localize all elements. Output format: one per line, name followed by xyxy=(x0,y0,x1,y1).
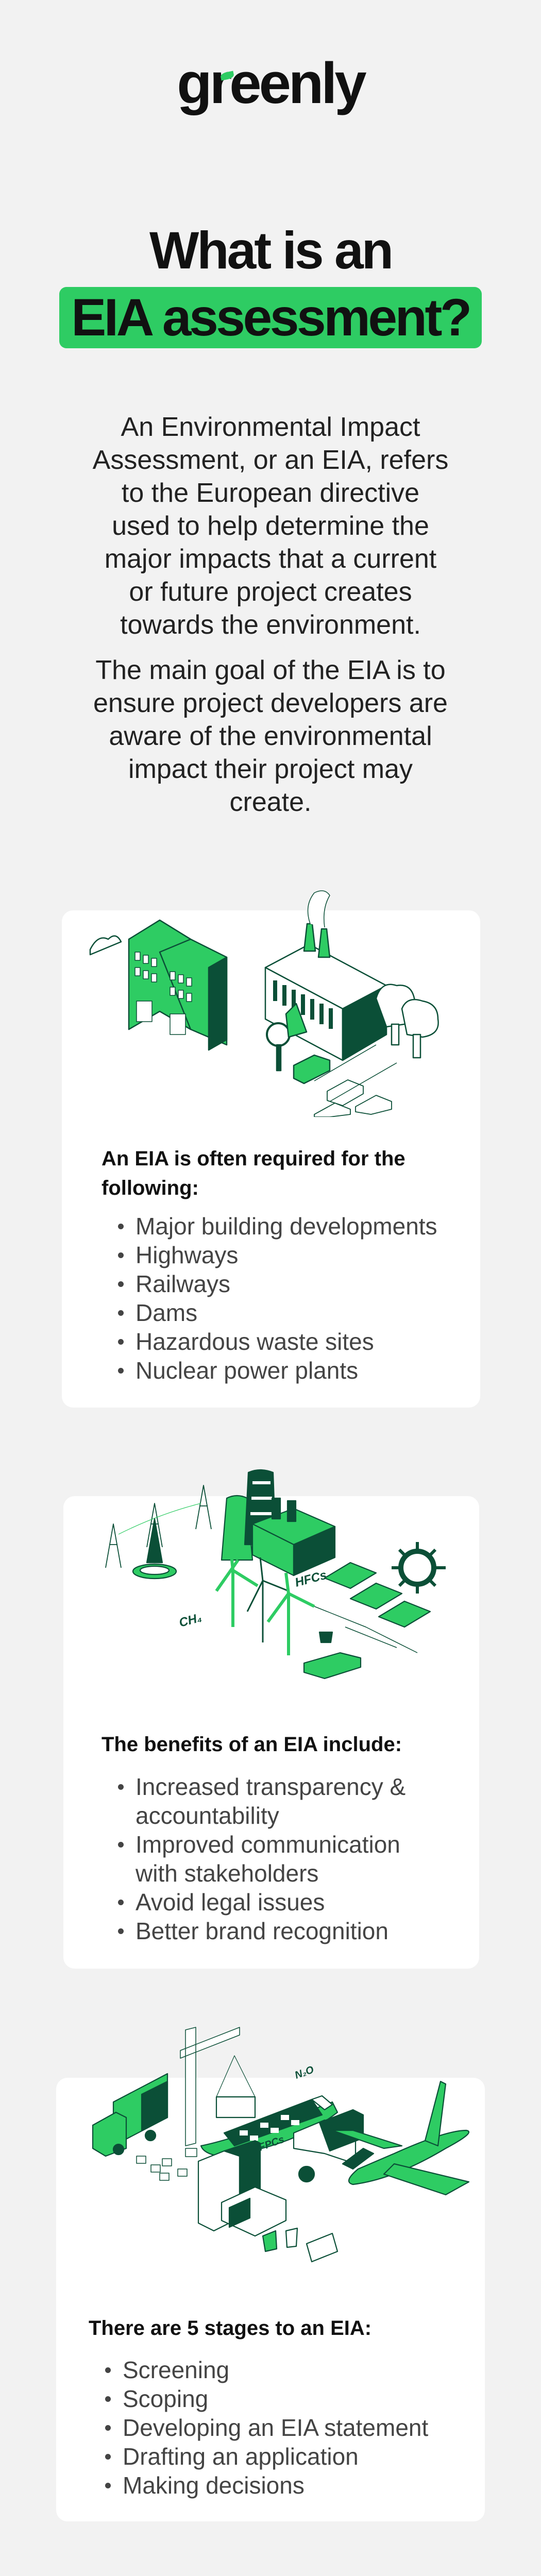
list: required projects: Major building developments xyxy=(136,1213,437,1240)
heading: stages: There are 5 stages to an EIA: xyxy=(89,2317,371,2340)
intro paragraph 1: An Environmental Impact xyxy=(121,412,420,442)
list: benefits: Avoid legal issues xyxy=(136,1889,325,1916)
list: stages: Scoping xyxy=(123,2385,208,2412)
list: required projects: Hazardous waste sites xyxy=(136,1328,374,1355)
illustration: energy, wind turbines, solar panels: HFCs xyxy=(294,1568,328,1590)
list: required projects: Nuclear power plants xyxy=(136,1357,358,1384)
panel: benefits xyxy=(63,1496,479,1969)
illustration: transport, ship, plane, crane: N₂O xyxy=(293,2064,315,2081)
illustration: energy, wind turbines, solar panels xyxy=(105,1469,446,1680)
list: benefits: Improved communication xyxy=(136,1831,400,1858)
list: stages: Screening xyxy=(123,2357,229,2383)
illustration: transport, ship, plane, crane xyxy=(92,2027,470,2263)
list: benefits: Increased transparency & xyxy=(136,1773,405,1800)
logo: top greenly: greenly xyxy=(177,51,364,115)
list: required projects xyxy=(118,1213,437,1384)
intro paragraph 2: impact their project may xyxy=(128,754,413,784)
heading: required for: An EIA is often required for the xyxy=(102,1147,405,1170)
intro paragraph 1: major impacts that a current xyxy=(105,544,436,574)
list: benefits xyxy=(118,1773,405,1944)
heading: required for xyxy=(102,1147,405,1199)
list: benefits: accountability xyxy=(136,1802,279,1829)
intro paragraph 1 xyxy=(93,412,448,640)
intro paragraph 1: to the European directive xyxy=(122,478,419,508)
intro paragraph 1: Assessment, or an EIA, refers xyxy=(93,445,448,475)
panel: required for xyxy=(62,910,480,1408)
list: stages: Making decisions xyxy=(123,2472,305,2499)
list: benefits: with stakeholders xyxy=(136,1860,318,1887)
intro paragraph 2: The main goal of the EIA is to xyxy=(95,655,446,685)
title highlight: EIA assessment?: EIA assessment? xyxy=(71,288,470,347)
list: required projects: Highways xyxy=(136,1242,238,1268)
heading: benefits: The benefits of an EIA include: xyxy=(102,1733,402,1756)
intro paragraph 2: aware of the environmental xyxy=(109,721,432,751)
list: required projects: Railways xyxy=(136,1270,230,1297)
intro paragraph 2 xyxy=(93,655,448,817)
list: stages xyxy=(105,2357,428,2499)
intro paragraph 1: used to help determine the xyxy=(112,511,429,541)
list: benefits: Better brand recognition xyxy=(136,1918,388,1944)
intro paragraph 2: ensure project developers are xyxy=(93,688,448,718)
title xyxy=(59,221,482,348)
intro paragraph 2: create. xyxy=(230,787,311,817)
intro paragraph 1: towards the environment. xyxy=(120,610,421,640)
illustration: city buildings, factory, parking xyxy=(90,890,439,1117)
list: stages: Developing an EIA statement xyxy=(123,2414,428,2441)
intro paragraph 1: or future project creates xyxy=(129,577,412,607)
title line 1: What is an xyxy=(149,221,392,280)
list: stages: Drafting an application xyxy=(123,2443,359,2470)
heading: required for: following: xyxy=(102,1177,199,1199)
list: required projects: Dams xyxy=(136,1299,197,1326)
panel: 5 stages xyxy=(56,2078,485,2521)
illustration: transport, ship, plane, crane: FPCs xyxy=(257,2134,286,2154)
illustration: energy, wind turbines, solar panels: CH₄ xyxy=(178,1611,203,1630)
